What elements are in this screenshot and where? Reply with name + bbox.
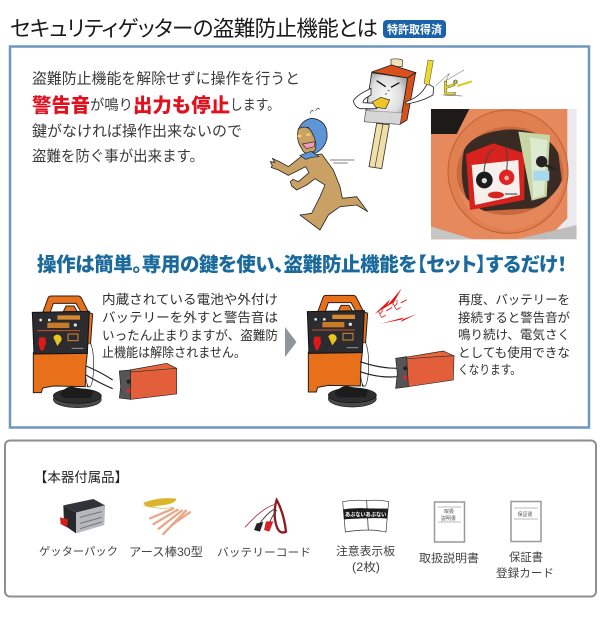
icon: warning signs <box>343 500 389 532</box>
icon: instruction manual: 説明書 <box>441 515 456 522</box>
icon: alarm lightning bolts: ビービー <box>376 295 411 321</box>
heading: easy operation: 操作は簡単。専用の鍵を使い、盗難防止機能を【セット】するだけ！ <box>37 253 567 276</box>
text block: reconnecting the battery: としても使用できな <box>458 345 570 360</box>
label: warning signs: (2枚) <box>352 560 380 574</box>
text block: alarm explanation: 鍵がなければ操作出来ないので <box>32 123 242 140</box>
label: warning signs: 注意表示板 <box>336 544 396 558</box>
illustration: energizer with battery reconnected and alarm <box>307 288 454 407</box>
text block: removing the battery: いったん止まりますが、盗難防 <box>102 328 278 343</box>
label: earth rod: アース棒30型 <box>129 545 203 559</box>
text block: reconnecting the battery: 鳴り続け、電気さく <box>458 327 570 342</box>
text block: alarm explanation: 盗難防止機能を解除せずに操作を行うと <box>32 70 300 88</box>
label: warranty and registration card <box>496 550 554 580</box>
icon: warranty: 保証書 <box>518 511 533 518</box>
text block: reconnecting the battery: 再度、バッテリーを <box>458 292 570 307</box>
arrow: next step <box>285 327 296 357</box>
text block: reconnecting the battery <box>458 292 570 377</box>
text block: reconnecting the battery: 接続すると警告音が <box>458 310 570 325</box>
label: warning signs <box>336 544 396 574</box>
icon: instruction manual: 取扱 <box>444 508 454 515</box>
label: warranty and registration card: 保証書 <box>509 550 543 564</box>
text block: alarm explanation: 警告音 <box>32 94 90 117</box>
icon: earth rods <box>143 498 191 535</box>
text block: alarm explanation <box>32 70 300 165</box>
icon: battery cord <box>245 500 286 532</box>
heading: included accessories: 【本器付属品】 <box>34 470 128 485</box>
icon: getter pack <box>60 499 105 533</box>
text block: removing the battery: バッテリーを外すと警告音は <box>102 310 278 325</box>
text block: alarm explanation: 出力も停止 <box>133 94 230 117</box>
illustration: energizer with battery disconnected <box>32 296 177 408</box>
icon: instruction manual <box>434 502 464 542</box>
badge: patent acquired: 特許取得済 <box>387 22 442 36</box>
icon: warranty <box>511 502 541 542</box>
illustration: fleeing thief <box>270 108 368 230</box>
icon: warning signs: あぶないあぶない <box>345 511 387 519</box>
label: warranty and registration card: 登録カード <box>496 566 554 580</box>
icon: beep sound <box>435 70 472 98</box>
text block: removing the battery: 止機能は解除されません。 <box>102 345 246 360</box>
text block: alarm explanation: します。 <box>230 97 280 114</box>
text block: removing the battery: 内蔵されている電池や外付け <box>102 292 278 307</box>
text block: alarm explanation: 盗難を防ぐ事が出来ます。 <box>32 148 204 165</box>
label: getter pack: ゲッターパック <box>39 545 118 558</box>
badge: patent acquired <box>383 20 446 38</box>
panel: included accessories <box>5 440 596 596</box>
text block: removing the battery <box>102 292 278 360</box>
text block: reconnecting the battery: くなります。 <box>458 363 521 377</box>
title: セキュリティゲッターの盗難防止機能とは <box>10 17 378 41</box>
photo: anti-theft unit inside the energizer <box>431 109 577 239</box>
illustration: angry alarm box on post <box>353 59 434 169</box>
label: instruction manual: 取扱説明書 <box>419 551 479 565</box>
text block: alarm explanation: が鳴り <box>90 97 133 114</box>
label: battery cord: バッテリーコード <box>217 546 311 559</box>
panel: anti-theft function <box>10 46 589 428</box>
icon: beep sound: ピ <box>442 79 458 98</box>
